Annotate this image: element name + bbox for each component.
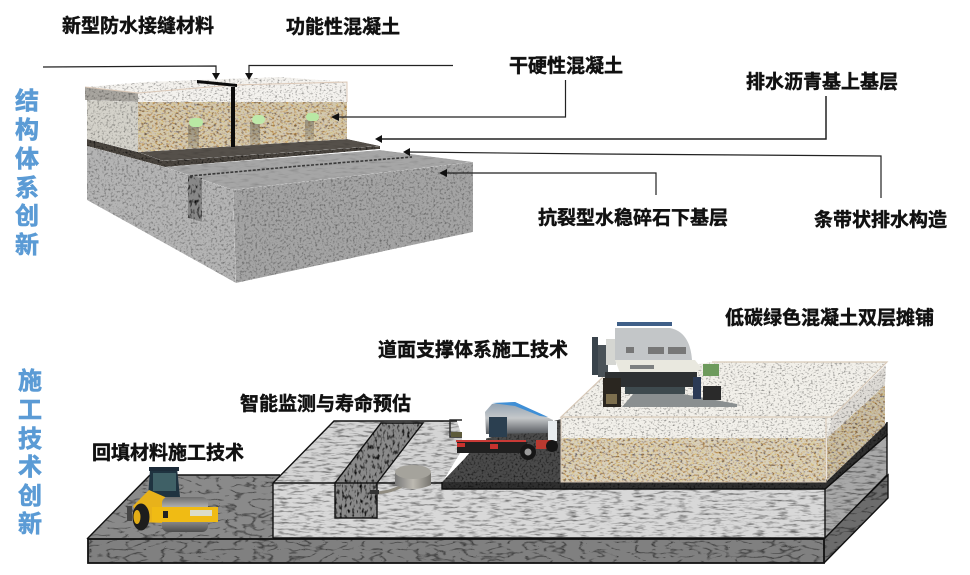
label: smart monitoring and life prediction: 智能监测与寿命预估 (240, 392, 411, 415)
icon: asphalt distributor truck (450, 402, 558, 460)
label: crack-resistant macadam base: 抗裂型水稳碎石下基层 (538, 206, 728, 229)
upper base layer: drainage asphalt (87, 139, 380, 167)
arrow: waterproof joint leader (43, 66, 220, 80)
middle cement-stabilized layer (273, 421, 887, 538)
monitoring trench (335, 423, 423, 518)
strip drainage structure (188, 157, 412, 222)
two-layer low-carbon concrete slab (561, 362, 887, 482)
asphalt layer (442, 418, 887, 489)
arrow: dry-hard concrete leader (331, 80, 566, 121)
label: drainage asphalt base: 排水沥青基上基层 (746, 71, 898, 93)
icon: concrete paver (592, 322, 737, 407)
heading: construction technology innovation: 新 (18, 511, 42, 538)
heading: construction technology innovation: 创 (18, 483, 42, 510)
functional concrete layer (85, 77, 347, 102)
label: strip drainage structure: 条带状排水构造 (814, 209, 947, 231)
label: dry-hard concrete: 干硬性混凝土 (509, 54, 623, 77)
sensor device (370, 465, 431, 494)
heading: construction technology innovation (18, 368, 42, 538)
heading: structural system innovation: 创 (15, 203, 39, 230)
heading: construction technology innovation: 术 (18, 454, 42, 481)
label: low-carbon two-layer paving: 低碳绿色混凝土双层摊铺 (725, 306, 934, 329)
lower base layer: crack-resistant stabilized macadam (87, 146, 473, 283)
label: backfill construction: 回填材料施工技术 (92, 442, 244, 464)
icon: road roller (127, 467, 218, 532)
heading: construction technology innovation: 施 (18, 368, 42, 395)
heading: construction technology innovation: 技 (18, 426, 42, 453)
arrow: strip drainage leader (403, 148, 881, 198)
dowel bars (188, 113, 319, 149)
dry-hard concrete layer (87, 100, 347, 152)
arrow: functional concrete leader (245, 66, 453, 80)
panel: construction process diagram (87, 322, 888, 563)
heading: structural system innovation: 系 (15, 175, 39, 202)
panel: pavement structure cross-section (85, 77, 473, 283)
heading: structural system innovation: 构 (15, 117, 39, 144)
heading: structural system innovation: 体 (15, 146, 39, 173)
arrow: drainage asphalt leader (375, 96, 826, 143)
waterproof joint material (197, 80, 237, 147)
label: pavement support construction: 道面支撑体系施工技术 (378, 338, 568, 361)
label: waterproof joint material: 新型防水接缝材料 (62, 14, 214, 37)
label: functional concrete: 功能性混凝土 (286, 15, 400, 38)
heading: construction technology innovation: 工 (18, 397, 42, 424)
heading: structural system innovation: 新 (15, 232, 39, 259)
heading: structural system innovation: 结 (15, 88, 39, 115)
arrow: macadam base leader (439, 169, 656, 195)
heading: structural system innovation (15, 88, 39, 259)
bottom stone layer (87, 475, 888, 563)
